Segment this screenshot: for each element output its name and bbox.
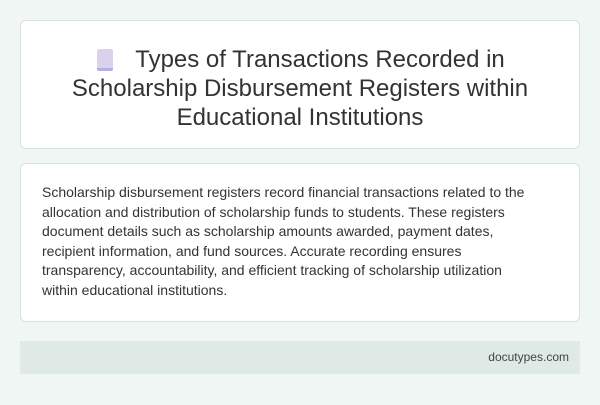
description text: recipient information, and fund sources. Accurate recording ensures xyxy=(42,242,461,258)
description text: document details such as scholarship amounts awarded, payment dates, xyxy=(42,223,493,239)
title: Types of Transactions Recorded in xyxy=(135,46,505,73)
title card xyxy=(20,20,580,149)
footer text: docutypes.com xyxy=(488,350,569,364)
description text: Scholarship disbursement registers record financial transactions related to the xyxy=(42,184,524,200)
icon: document xyxy=(97,49,113,71)
description text: allocation and distribution of scholarship funds to students. These registers xyxy=(42,204,505,220)
title: Educational Institutions xyxy=(177,104,423,131)
description card xyxy=(20,163,580,322)
footer xyxy=(20,341,580,374)
description text: transparency, accountability, and efficient tracking of scholarship utilization xyxy=(42,262,502,278)
description text: within educational institutions. xyxy=(42,282,227,298)
title xyxy=(72,46,528,131)
description text xyxy=(42,184,524,298)
title: Scholarship Disbursement Registers within xyxy=(72,75,528,102)
